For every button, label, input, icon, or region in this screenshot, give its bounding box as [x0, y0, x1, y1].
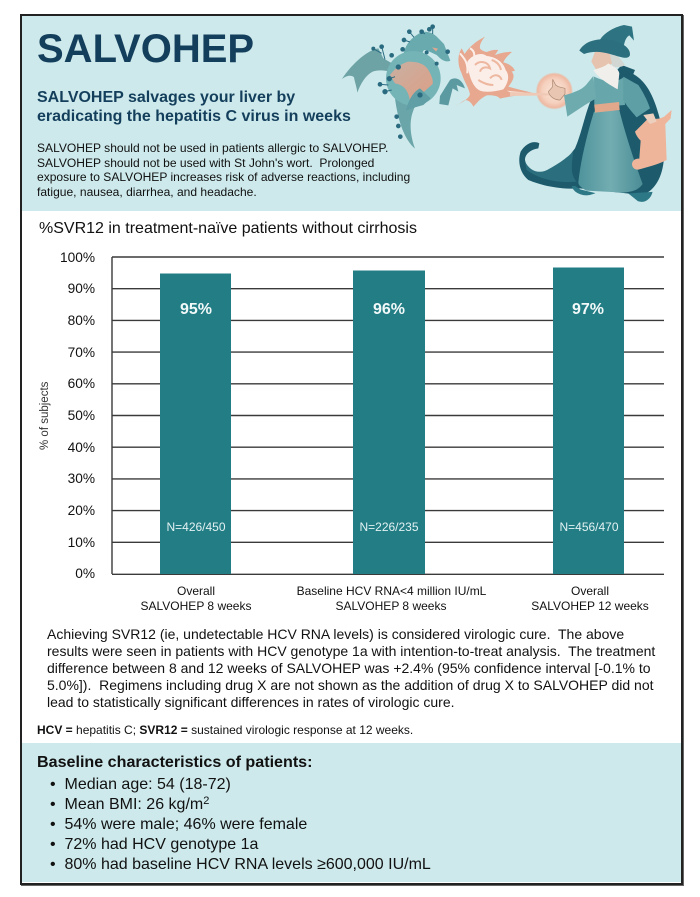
- explanatory paragraph: 5.0%]). Regimens including drug X are not shown as the addition of drug X to SALVOHEP did not: [47, 677, 654, 693]
- bullet list: [50, 776, 431, 873]
- explanatory paragraph: [47, 626, 656, 710]
- y-axis labels: 40%: [68, 440, 95, 455]
- y-axis labels: 80%: [68, 313, 95, 328]
- explanatory paragraph: difference between 8 and 12 weeks of SALVOHEP was +2.4% (95% confidence interval [-0.1% to: [47, 660, 651, 676]
- y-axis labels: 50%: [68, 408, 95, 423]
- bar: baseline under 4 million: N=226/235: [359, 520, 419, 534]
- subtitle: eradicating the hepatitis C virus in weeks: [37, 108, 351, 125]
- safety text: exposure to SALVOHEP increases risk of adverse reactions, including: [37, 170, 410, 184]
- bar: overall 12 weeks: 97%: [572, 301, 604, 318]
- x-axis labels: Overall: [177, 584, 215, 598]
- y-axis labels: [60, 250, 95, 581]
- bullet list: • Median age: 54 (18-72): [50, 776, 231, 793]
- panel heading: Baseline characteristics of patients:: [37, 753, 312, 771]
- explanatory paragraph: results were seen in patients with HCV genotype 1a with intention-to-treat analysis. The treatment: [47, 643, 655, 659]
- y-axis labels: 0%: [75, 566, 95, 581]
- title: SALVOHEP: [37, 27, 254, 71]
- safety text: [37, 141, 410, 199]
- bar: baseline under 4 million: [353, 270, 425, 574]
- y-axis labels: 60%: [68, 376, 95, 391]
- subtitle: SALVOHEP salvages your liver by: [37, 89, 295, 106]
- subtitle: [37, 89, 351, 125]
- x-axis labels: Overall: [571, 584, 609, 598]
- panel: header: [22, 16, 681, 211]
- icon: dragon: [342, 25, 465, 149]
- explanatory paragraph: lead to statistically significant differences in rates of virologic cure.: [47, 694, 454, 710]
- x-axis labels: SALVOHEP 12 weeks: [531, 599, 649, 613]
- panel: baseline characteristics: [22, 743, 681, 882]
- y-axis labels: 30%: [68, 471, 95, 486]
- y-axis labels: 10%: [68, 535, 95, 550]
- bar: baseline under 4 million: 96%: [373, 301, 405, 318]
- x-axis labels: SALVOHEP 8 weeks: [141, 599, 251, 613]
- x-axis labels: SALVOHEP 8 weeks: [336, 599, 446, 613]
- bullet list: • 72% had HCV genotype 1a: [50, 836, 258, 853]
- icon: wizard: [510, 25, 672, 201]
- y-axis labels: 90%: [68, 281, 95, 296]
- bar: overall 12 weeks: N=456/470: [559, 520, 619, 534]
- bullet list: • Mean BMI: 26 kg/m2: [50, 795, 209, 813]
- y-axis title: % of subjects: [39, 381, 51, 450]
- chart title: %SVR12 in treatment-naïve patients without cirrhosis: [39, 220, 417, 237]
- x-axis labels: [141, 584, 649, 613]
- explanatory paragraph: Achieving SVR12 (ie, undetectable HCV RNA levels) is considered virologic cure. The above: [47, 626, 624, 642]
- bullet list: • 54% were male; 46% were female: [50, 816, 307, 833]
- safety text: fatigue, nausea, diarrhea, and headache.: [37, 185, 257, 199]
- y-axis labels: 20%: [68, 503, 95, 518]
- bar: overall 8 weeks: N=426/450: [166, 520, 226, 534]
- y-axis labels: 70%: [68, 345, 95, 360]
- y-axis labels: 100%: [60, 250, 95, 265]
- icon: fire: [456, 37, 540, 107]
- bar: overall 8 weeks: 95%: [180, 301, 212, 318]
- x-axis labels: Baseline HCV RNA<4 million IU/mL: [297, 584, 487, 598]
- abbreviations: HCV = hepatitis C; SVR12 = sustained virologic response at 12 weeks.: [37, 723, 413, 737]
- bar: overall 12 weeks: [553, 268, 624, 574]
- safety text: SALVOHEP should not be used with St John's wort. Prolonged: [37, 156, 374, 170]
- bullet list: • 80% had baseline HCV RNA levels ≥600,000 IU/mL: [50, 856, 431, 873]
- safety text: SALVOHEP should not be used in patients allergic to SALVOHEP.: [37, 141, 388, 155]
- bar: overall 8 weeks: [160, 274, 231, 574]
